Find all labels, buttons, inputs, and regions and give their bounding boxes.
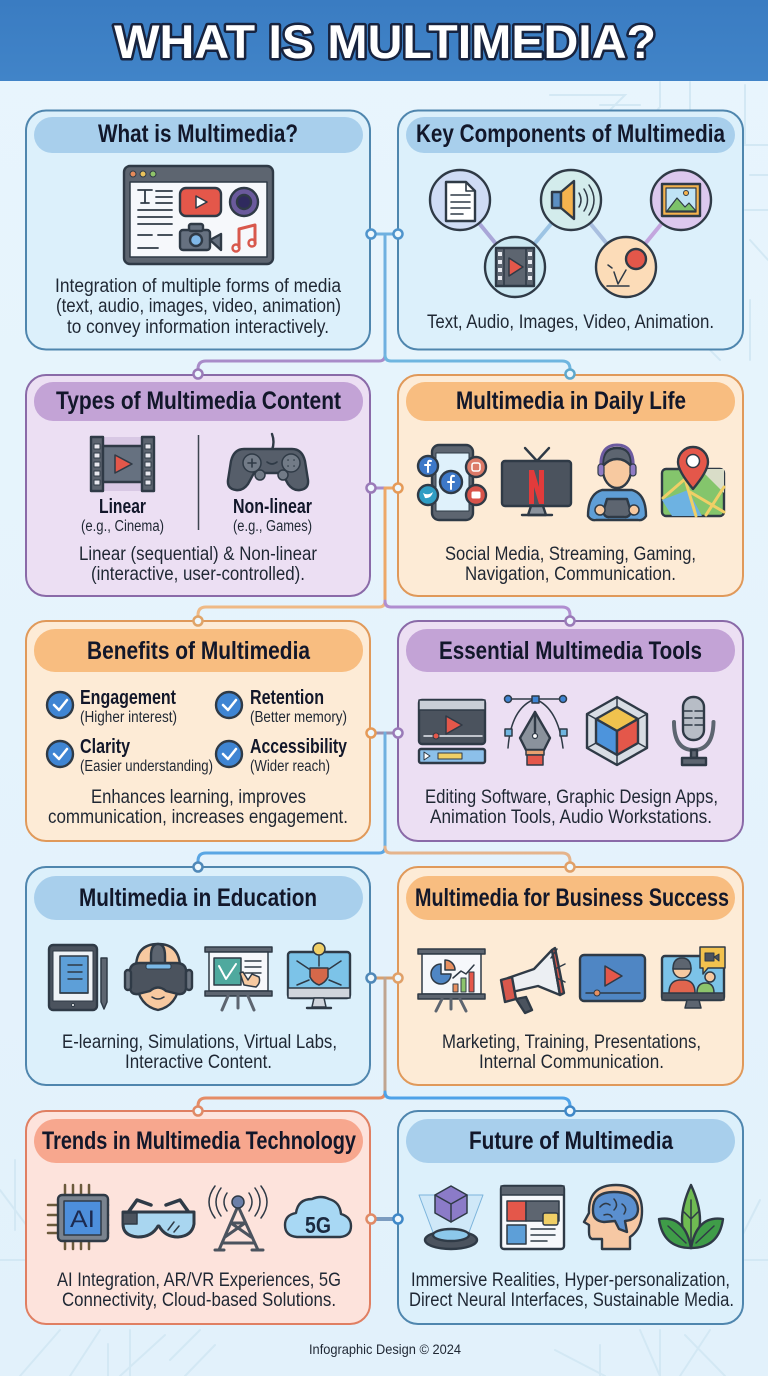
list: benefit check items: Engagement [80, 687, 176, 709]
description: business: Internal Communication. [479, 1052, 664, 1073]
description: benefits: communication, increases engagement. [48, 807, 348, 828]
heading: types of content: Types of Multimedia Content [56, 387, 342, 415]
description: future [409, 1270, 734, 1311]
panel: key components [398, 110, 743, 350]
description: what is multimedia: Integration of multiple forms of media [55, 276, 341, 297]
labels: linear and non-linear [81, 496, 312, 535]
icon: signal tower [209, 1186, 267, 1250]
labels: linear and non-linear: Non-linear [233, 496, 312, 518]
description: education: E-learning, Simulations, Virtual Labs, [62, 1032, 337, 1053]
panel: types of content [26, 375, 370, 596]
panel: education [26, 867, 370, 1085]
icon: video editor [419, 700, 485, 763]
icon: e-reader tablet [49, 945, 107, 1010]
heading: benefits: Benefits of Multimedia [87, 637, 311, 665]
icon: personalized web page [501, 1186, 564, 1249]
icon: 3d cube [587, 697, 647, 765]
panel: tools [398, 621, 743, 841]
heading: future: Future of Multimedia [469, 1127, 674, 1155]
heading: daily life: Multimedia in Daily Life [456, 387, 686, 415]
description: types of content: (interactive, user-controlled). [91, 564, 305, 585]
diagram: component nodes [430, 170, 711, 297]
icon: 5g cloud [285, 1197, 351, 1238]
icon: presentation board [205, 947, 272, 1010]
icon: chart board [418, 949, 485, 1011]
list: benefit check items: (Easier understanding) [80, 758, 213, 775]
labels: linear and non-linear: (e.g., Cinema) [81, 518, 164, 535]
description: education [62, 1032, 337, 1073]
description: business [442, 1032, 701, 1073]
heading: education: Multimedia in Education [79, 884, 317, 912]
list: benefit check items: Clarity [80, 736, 131, 758]
connector network [198, 234, 570, 1219]
description: tools [425, 787, 718, 828]
list: benefit check items: (Higher interest) [80, 709, 177, 726]
icon: media browser window [124, 166, 273, 264]
description: types of content: Linear (sequential) & Non-linear [79, 544, 318, 565]
header banner [0, 0, 768, 81]
description: benefits: Enhances learning, improves [91, 787, 306, 808]
panel: benefits [26, 621, 370, 841]
icon: 5g cloud: 5G [305, 1212, 331, 1238]
panel: trends [26, 1111, 370, 1324]
description: what is multimedia: to convey information interactively. [67, 317, 329, 338]
description: key components: Text, Audio, Images, Video, Animation. [427, 312, 714, 333]
list: benefit check items: (Better memory) [250, 709, 347, 726]
description: types of content [79, 544, 318, 585]
description: what is multimedia [55, 276, 341, 338]
labels: linear and non-linear: Linear [99, 496, 146, 518]
description: daily life: Social Media, Streaming, Gaming, [445, 544, 696, 565]
icon: vector pen [504, 696, 567, 765]
title: WHAT IS MULTIMEDIA? [114, 15, 656, 68]
icon: microphone [674, 697, 714, 765]
icon: game controller [228, 434, 308, 490]
icon: ai chip: AI [70, 1206, 95, 1233]
heading: tools: Essential Multimedia Tools [439, 637, 702, 665]
list: benefit check items [47, 687, 348, 775]
icon: vr headset [125, 944, 192, 1010]
description: tools: Editing Software, Graphic Design Apps, [425, 787, 718, 808]
icon: video player [580, 955, 645, 1001]
icon: green leaves [659, 1185, 723, 1248]
icon: megaphone [501, 948, 565, 1013]
labels: linear and non-linear: (e.g., Games) [233, 518, 312, 535]
description: daily life: Navigation, Communication. [465, 564, 676, 585]
connector nodes [194, 230, 574, 1224]
icon: simulation monitor [288, 943, 350, 1008]
description: trends: Connectivity, Cloud-based Solutions. [62, 1290, 336, 1311]
list: benefit check items: (Wider reach) [250, 758, 330, 775]
icon: ar glasses [123, 1200, 194, 1237]
icon: video call monitor [662, 947, 725, 1008]
icon: brain in head [584, 1185, 642, 1249]
icon: ai chip [48, 1185, 108, 1249]
list: benefit check items: Retention [250, 687, 324, 709]
description: what is multimedia: (text, audio, images, video, animation) [56, 296, 341, 317]
description: business: Marketing, Training, Presentations, [442, 1032, 701, 1053]
panel: business [398, 867, 743, 1085]
heading: trends: Trends in Multimedia Technology [42, 1127, 356, 1155]
panel: daily life [398, 375, 743, 596]
footer: Infographic Design © 2024 [309, 1341, 461, 1357]
list: benefit check items: Accessibility [250, 736, 348, 758]
icon: film strip [91, 437, 154, 491]
description: tools: Animation Tools, Audio Workstations. [430, 807, 712, 828]
icon: phone with social media [418, 445, 486, 520]
icon: gamer with headset [588, 445, 646, 520]
description: education: Interactive Content. [125, 1052, 272, 1073]
description: future: Immersive Realities, Hyper-personalization, [411, 1270, 730, 1291]
heading: what is multimedia: What is Multimedia? [98, 120, 298, 148]
panel: future [398, 1111, 743, 1324]
description: trends: AI Integration, AR/VR Experiences, 5G [57, 1270, 341, 1291]
panel: what is multimedia [26, 110, 370, 350]
icon: hologram [419, 1186, 483, 1249]
icon: streaming tv [502, 448, 571, 515]
description: trends [57, 1270, 341, 1311]
description: daily life [445, 544, 696, 585]
icon: map with pin [662, 447, 724, 516]
description: benefits [48, 787, 348, 828]
